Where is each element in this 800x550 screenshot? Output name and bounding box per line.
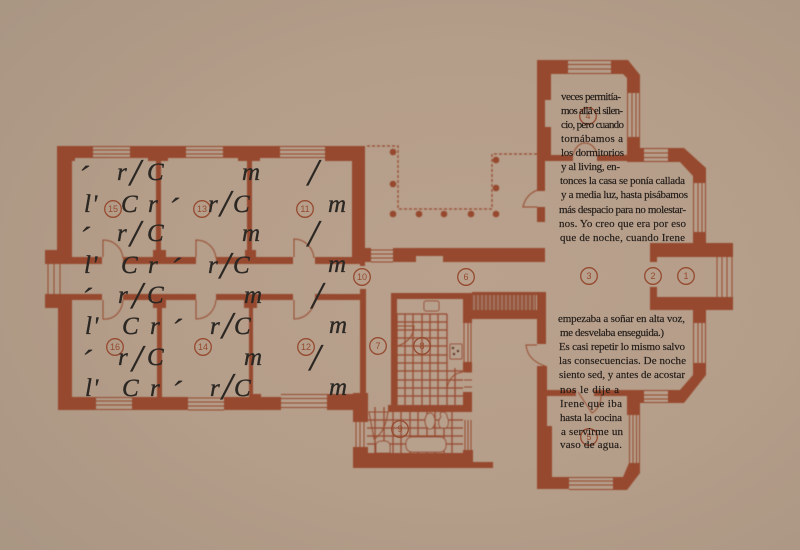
marker 7: 7	[375, 341, 381, 351]
letter row 4	[84, 245, 346, 287]
lower text block: me desvelaba enseguida.)	[560, 327, 664, 339]
upper text block: tonces la casa se ponía callada	[560, 175, 685, 187]
lower text block: siento sed, y antes de acostar	[559, 369, 685, 381]
marker 10	[354, 269, 370, 285]
letter row 5: r	[118, 282, 128, 309]
letter row 2: C	[233, 191, 250, 218]
upper text block: tornábamos a	[561, 133, 623, 145]
marker 6	[458, 269, 474, 285]
marker 15	[105, 201, 121, 217]
marker 12: 12	[301, 342, 311, 352]
letter row 7: r	[118, 344, 128, 371]
lower text block	[558, 313, 686, 451]
marker 10: 10	[357, 272, 367, 282]
marker 2: 2	[650, 271, 656, 281]
marker 14: 14	[198, 342, 208, 352]
floor plan	[45, 60, 733, 490]
marker 3	[581, 268, 597, 284]
marker 4: 4	[585, 111, 591, 121]
west wing windows	[48, 146, 327, 410]
marker 5	[581, 429, 597, 445]
letter row 5: C	[147, 282, 164, 309]
overprinted italic letters	[78, 152, 347, 410]
marker 8: 8	[419, 341, 425, 351]
kitchen tiles	[397, 314, 463, 405]
kitchen and bath windows	[356, 323, 472, 450]
letter row 1: C	[147, 159, 164, 186]
upper text block: y al living, en-	[561, 161, 620, 173]
letter row 4: r	[148, 252, 158, 279]
letter row 6	[85, 305, 347, 348]
kitchen walls	[353, 292, 545, 468]
letter row 1: /	[306, 152, 322, 194]
letter row 4: l	[84, 252, 91, 279]
marker 2	[645, 268, 661, 284]
letter row 1: /	[128, 152, 144, 194]
letter row 5	[81, 275, 326, 317]
letter row 7: m	[244, 344, 262, 371]
lower text block: vaso de agua.	[560, 439, 622, 451]
marker 13: 13	[197, 204, 207, 214]
letter row 6: /	[220, 305, 236, 347]
upper text block: veces permitía-	[561, 91, 621, 103]
letter row 6: l	[85, 313, 92, 340]
letter row 5: m	[244, 282, 262, 309]
letter row 2: l	[84, 191, 91, 218]
letter row 2: C	[121, 191, 138, 218]
letter row 3: r	[117, 220, 127, 247]
letter row 2	[84, 183, 346, 227]
stair hatching	[472, 295, 536, 310]
west wing walls	[45, 146, 366, 410]
letter row 6: r	[210, 313, 220, 340]
upper text block: los dormitorios	[561, 147, 624, 159]
letter row 3: /	[128, 213, 144, 255]
marker 1: 1	[683, 271, 689, 281]
letter row 4: r	[208, 252, 218, 279]
lower text block: las consecuencias. De noche	[559, 355, 686, 367]
hall window	[371, 250, 393, 262]
marker 9: 9	[397, 424, 403, 434]
upper text block: más despacio para no molestar-	[559, 204, 686, 216]
letter row 4: m	[328, 251, 346, 278]
letter row 1: m	[242, 159, 260, 186]
letter row 3	[79, 213, 322, 256]
letter row 8: r	[150, 375, 160, 402]
upper text block: que de noche, cuando Irene	[560, 232, 685, 244]
letter row 8	[85, 366, 347, 410]
marker 11: 11	[300, 204, 310, 214]
letter row 7	[81, 337, 324, 380]
letter row 3: m	[242, 220, 260, 247]
letter row 6: ´	[171, 312, 183, 348]
marker 8	[414, 338, 430, 354]
bathroom fixtures	[369, 412, 448, 453]
letter row 1: r	[117, 159, 127, 186]
letter row 8: ´	[171, 374, 183, 410]
marker 16: 16	[110, 342, 120, 352]
letter row 8: '	[93, 375, 99, 402]
marker 13	[194, 201, 210, 217]
lower text block: Irene que iba	[560, 398, 622, 410]
letter row 5: /	[130, 275, 146, 317]
letter row 8: C	[122, 375, 139, 402]
upper text block: mos allá el silen-	[561, 105, 623, 117]
letter row 8: r	[210, 375, 220, 402]
letter row 4: '	[92, 252, 98, 279]
letter row 6: '	[93, 313, 99, 340]
lower text block: a servirme un	[561, 426, 624, 438]
letter row 4: /	[218, 245, 234, 287]
letter row 4: C	[121, 252, 138, 279]
corridor doors	[103, 239, 315, 319]
letter row 2: '	[92, 191, 98, 218]
lower text block: nos le dije a	[560, 384, 619, 396]
marker 3: 3	[586, 271, 592, 281]
letter row 2: ´	[168, 191, 180, 227]
letter row 8: l	[85, 375, 92, 402]
letter row 1	[78, 152, 322, 195]
bathroom tiles	[367, 407, 463, 453]
upper text block: y a media luz, hasta pisábamos	[561, 189, 688, 201]
letter row 6: m	[329, 312, 347, 339]
marker 1	[678, 268, 694, 284]
porch columns	[390, 149, 499, 217]
letter row 4: C	[233, 252, 250, 279]
letter row 6: r	[150, 313, 160, 340]
letter row 6: C	[234, 313, 251, 340]
letter row 1: ´	[78, 159, 90, 195]
letter row 5: ´	[81, 281, 93, 317]
upper text block	[559, 91, 688, 244]
room number markers	[105, 108, 694, 445]
letter row 5: /	[310, 275, 326, 317]
letter row 7: ´	[81, 343, 93, 379]
letter row 7: /	[308, 337, 324, 379]
letter row 4: ´	[170, 251, 182, 287]
marker 5: 5	[586, 432, 592, 442]
marker 14	[195, 339, 211, 355]
letter row 6: C	[122, 313, 139, 340]
marker 12	[298, 339, 314, 355]
letter row 3: C	[147, 220, 164, 247]
kitchen stove and fixtures	[397, 301, 463, 388]
letter row 7: C	[147, 344, 164, 371]
east wing windows	[568, 60, 732, 490]
marker 16	[107, 339, 123, 355]
east wing walls	[520, 60, 733, 490]
marker 4	[580, 108, 596, 124]
marker 9	[392, 421, 408, 437]
letter row 2: /	[218, 183, 234, 225]
letter row 7: /	[130, 338, 146, 380]
marker 7	[370, 338, 386, 354]
letter row 2: r	[148, 191, 158, 218]
hall north wall	[365, 248, 545, 262]
letter row 2: r	[208, 191, 218, 218]
porch outline	[367, 146, 537, 209]
letter row 3: /	[306, 213, 322, 255]
letter row 8: m	[329, 374, 347, 401]
east wing doors	[523, 143, 601, 413]
marker 11	[297, 201, 313, 217]
marker 6: 6	[463, 272, 469, 282]
letter row 8: C	[234, 375, 251, 402]
marker 15: 15	[108, 204, 118, 214]
letter row 3: ´	[79, 220, 91, 256]
lower text block: hasta la cocina	[560, 412, 622, 424]
letter row 2: m	[328, 191, 346, 218]
upper text block: nos. Yo creo que era por eso	[559, 218, 686, 230]
lower text block: Es casi repetir lo mismo salvo	[559, 341, 686, 353]
letter row 8: /	[220, 366, 236, 408]
upper text block: cio, pero cuando	[561, 119, 624, 131]
lower text block: empezaba a soñar en alta voz,	[558, 313, 685, 325]
